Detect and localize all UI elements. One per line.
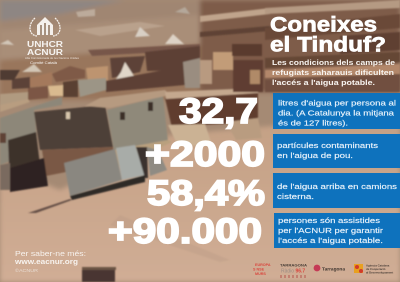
icon: laurel and sheltering hands xyxy=(30,17,60,36)
stat 1: blue panel: és de 127 litres). xyxy=(278,118,348,128)
logo: Tarragona Ràdio 96.7: Ràdio 96.7 xyxy=(281,268,305,274)
wordmark: ACNUR xyxy=(27,47,64,57)
more info text: Per saber-ne més: xyxy=(15,249,86,258)
stat 2: blue panel: en l'aigua de pou. xyxy=(277,151,353,160)
stat 3: blue panel: cisterna. xyxy=(277,192,314,201)
stat 4: blue panel xyxy=(108,212,400,251)
logo: Europa Sense Murs: S NSE xyxy=(253,268,265,272)
logo: Tarragona Ràdio 96.7: TARRAGONA xyxy=(280,264,307,268)
logo: Ajuntament de Tarragona: Tarragona xyxy=(322,266,346,272)
stat 3: blue panel: 58,4% xyxy=(147,174,265,213)
intro text: Les condicions dels camps de xyxy=(272,58,395,67)
tagline: Comitè Català xyxy=(30,61,57,65)
logo: Ajuntament de Tarragona xyxy=(314,265,346,272)
wordmark: UNHCR xyxy=(27,39,64,49)
stat 1: blue panel: 32,7 xyxy=(179,92,258,131)
stat 1: blue panel: dia. (A Catalunya la mitjana xyxy=(278,108,395,118)
title xyxy=(270,14,386,56)
logo: Europa Sense Murs xyxy=(253,263,271,276)
title: el Tinduf? xyxy=(270,34,386,56)
stat 4: blue panel: per l'ACNUR per garantir xyxy=(278,226,384,235)
intro text: refugiats saharauis dificulten xyxy=(272,68,394,77)
stat 3: blue panel: de l'aigua arriba en camions xyxy=(277,182,397,191)
stat 2: blue panel xyxy=(145,134,400,174)
stat 1: blue panel: litres d'aigua per persona al xyxy=(278,98,396,108)
logo: UNHCR ACNUR xyxy=(25,17,80,65)
more info text xyxy=(14,249,86,273)
more info text: www.eacnur.org xyxy=(14,257,78,266)
stat 1: blue panel xyxy=(179,92,400,131)
stat 2: blue panel: +2000 xyxy=(145,135,265,174)
stat 3: blue panel xyxy=(147,173,400,213)
intro text xyxy=(272,58,395,87)
stat 4: blue panel: l'accés a l'aigua potable. xyxy=(278,236,383,245)
title: Coneixes xyxy=(270,14,377,36)
logo: Europa Sense Murs: EUROPA xyxy=(255,263,271,267)
logo: Europa Sense Murs: MURS xyxy=(255,272,266,276)
intro text: l'accés a l'aigua potable. xyxy=(272,78,375,87)
logo: Agència Catalana de Cooperació: Agència Catalana xyxy=(366,264,390,268)
stat 2: blue panel: partícules contaminants xyxy=(277,141,378,150)
more info text: ©ACNUR xyxy=(15,267,39,273)
tagline: Alta Comissionada de les Nacions Unides xyxy=(25,57,80,60)
logo: Tarragona Ràdio 96.7 xyxy=(280,264,307,278)
stat 4: blue panel: +90.000 xyxy=(108,212,262,251)
wordmark xyxy=(27,39,64,57)
logo: Agència Catalana de Cooperació: de Cooperació xyxy=(366,267,386,271)
logo: Agència Catalana de Cooperació xyxy=(354,264,393,274)
partner logos xyxy=(253,263,393,278)
logo: Agència Catalana de Cooperació: al Desenvolupament xyxy=(366,270,393,274)
tagline xyxy=(25,57,80,65)
stat 4: blue panel: persones són assistides xyxy=(278,216,380,225)
